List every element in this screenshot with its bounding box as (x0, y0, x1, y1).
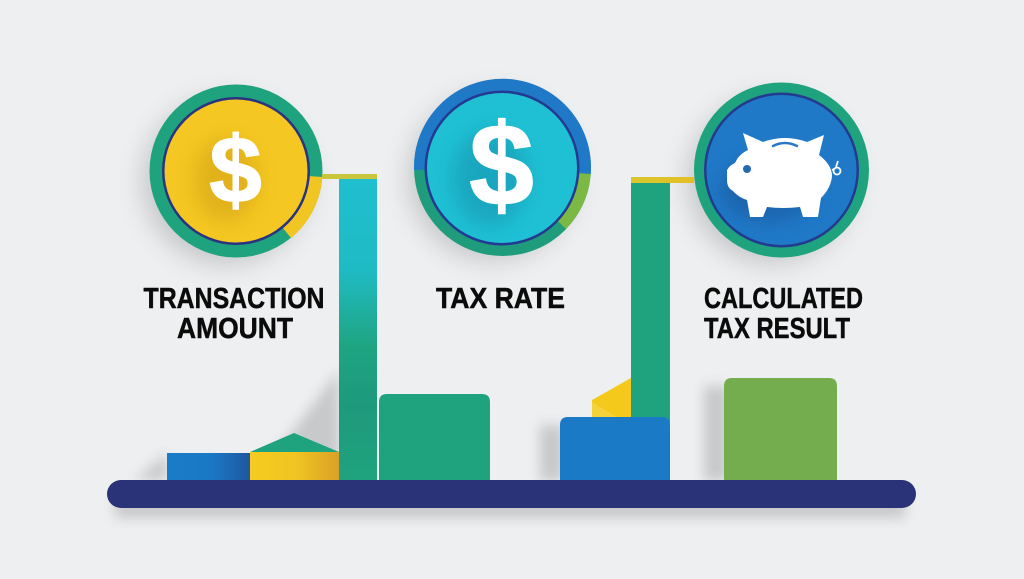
label: calculated tax result (704, 283, 863, 345)
tall bar: teal (339, 179, 377, 481)
connector strip: second bar (631, 177, 694, 183)
light green bar (724, 378, 837, 481)
connector strip: first bar (322, 174, 377, 179)
icon: tax rate coin (414, 79, 591, 256)
label: calculated tax result: TAX RESULT (704, 313, 850, 345)
baseline bar (107, 480, 916, 508)
label: transaction amount (144, 283, 324, 345)
ring segment: green (502, 168, 591, 229)
dollar sign: $ (209, 117, 262, 222)
label: tax rate: TAX RATE (436, 283, 565, 315)
icon: piggy bank coin (694, 82, 869, 258)
dollar sign: $ (469, 100, 534, 230)
drop shadows (115, 93, 905, 518)
small blue bar (167, 453, 250, 481)
label: calculated tax result: CALCULATED (704, 283, 863, 315)
blue bar (560, 417, 670, 481)
yellow house block (250, 433, 339, 481)
ring segment: yellow (236, 171, 322, 238)
green bar (379, 394, 490, 481)
yellow wedge (592, 378, 631, 418)
icon: transaction amount coin (150, 84, 322, 258)
tall bar: green (631, 183, 670, 423)
label: transaction amount: TRANSACTION (144, 283, 324, 315)
ring segment: blue (414, 79, 591, 174)
label: transaction amount: AMOUNT (177, 313, 293, 345)
piggy bank (727, 133, 840, 217)
